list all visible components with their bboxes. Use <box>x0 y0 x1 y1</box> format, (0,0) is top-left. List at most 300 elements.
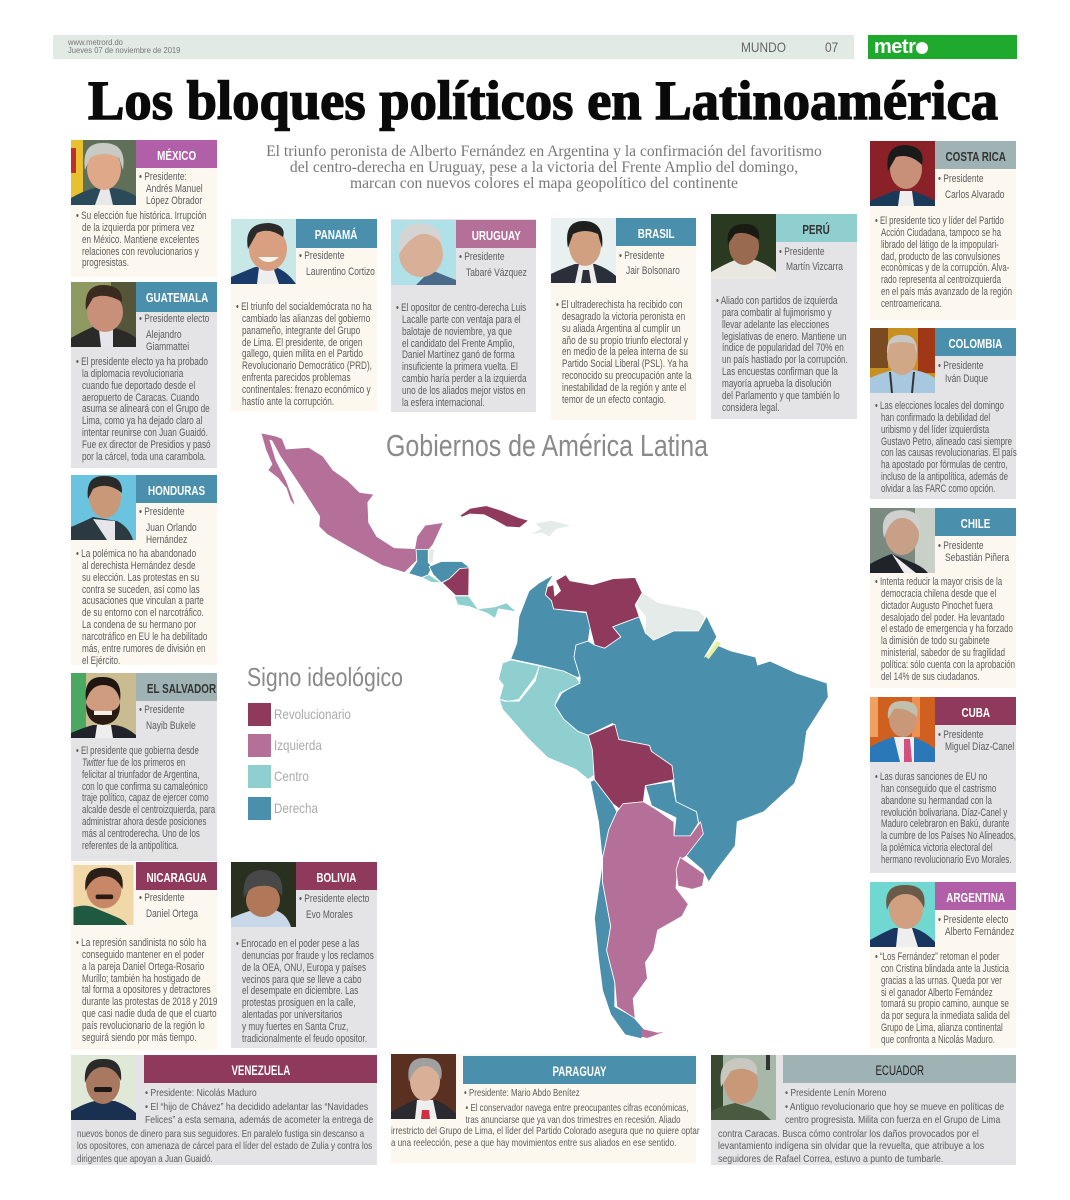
panel: Perú <box>711 214 857 419</box>
president and opening text <box>464 1086 689 1127</box>
text: Maduro celebraron en Bakú, durante <box>881 818 1009 830</box>
president <box>139 506 197 546</box>
heading: HONDURAS <box>148 483 205 498</box>
text: cambiado las alianzas del gobierno <box>242 313 370 325</box>
text: con lo que confirma su camaleónico <box>82 781 208 793</box>
text: más, entre rumores de división en <box>82 643 206 655</box>
president: Sebastián Piñera <box>945 552 1009 564</box>
header bar <box>53 35 854 59</box>
Argentina <box>603 802 703 1019</box>
text: legislativas de enero. Mantiene un <box>722 331 847 343</box>
text <box>77 1129 372 1166</box>
text: • La represión sandinista no sólo ha <box>76 937 206 949</box>
Brazil <box>555 616 828 882</box>
heading <box>296 862 377 890</box>
text: Grupo de Lima, alianza continental <box>881 1022 1003 1034</box>
text: alcalde desde el centroizquierda, para <box>82 804 215 816</box>
president and opening text: • Presidente Lenín Moreno <box>785 1088 886 1099</box>
president and opening text: centro progresista. Milita con fuerza en el Grupo de Lima <box>785 1115 1000 1126</box>
president and opening text <box>785 1086 1004 1128</box>
panel: Colombia <box>870 328 1016 499</box>
president: • Presidente <box>938 729 984 741</box>
portrait: Giammattei <box>71 282 136 347</box>
Peru <box>499 666 596 780</box>
heading: ECUADOR <box>875 1063 924 1078</box>
heading: BOLIVIA <box>316 870 357 885</box>
president <box>938 360 988 385</box>
legend: Centro <box>248 765 271 788</box>
text: la diplomacia revolucionaria <box>82 368 183 380</box>
text: Daniel Martínez ganó de forma <box>402 349 515 361</box>
heading <box>136 140 217 168</box>
date and site: www.metrord.do <box>68 38 123 47</box>
text: narcotráfico en EU le ha debilitado <box>82 631 207 643</box>
label: Izquierda: Izquierda <box>274 737 322 753</box>
legend: Revolucionario <box>248 703 271 726</box>
text: año de su propio triunfo electoral y <box>562 335 688 347</box>
text: democracia chilena desde que el <box>881 588 996 600</box>
legend: Signo ideológico <box>247 660 417 825</box>
panel: Venezuela <box>71 1055 377 1165</box>
heading <box>136 475 217 503</box>
heading <box>144 1055 377 1083</box>
text: denuncias por fraude y los reclamos <box>242 950 374 962</box>
text: librado del látigo de la impopulari- <box>881 239 999 251</box>
heading: MÉXICO <box>157 148 196 163</box>
president: • Presidente electo <box>139 313 209 325</box>
heading: URUGUAY <box>471 228 521 243</box>
president and opening text: • Presidente: Mario Abdo Benítez <box>464 1088 580 1099</box>
date and site: Jueves 07 de noviembre de 2019 <box>68 46 180 55</box>
logo: metro <box>868 35 1017 59</box>
text: hastío ante la corrupción. <box>242 396 334 408</box>
text: gallego, quien milita en el Partido <box>242 348 363 360</box>
president: • Presidente electo <box>938 914 1008 926</box>
president <box>938 730 1014 754</box>
text <box>236 301 372 408</box>
heading <box>776 214 857 242</box>
text: cuando fue deportado desde el <box>82 380 195 392</box>
president and opening text: • Antiguo revolucionario que hoy se mueve en políticas de <box>785 1102 1004 1113</box>
text <box>718 1129 984 1166</box>
map: Latin America <box>225 420 865 1050</box>
text: • Enrocado en el poder pese a las <box>236 938 359 950</box>
portrait: Nicolás Maduro <box>71 1055 136 1120</box>
Cuba <box>460 506 529 528</box>
text: que casi nadie duda de que el cuarto <box>82 1008 217 1020</box>
president: • Presidente <box>299 250 345 262</box>
portrait: Lenín Moreno <box>711 1055 776 1120</box>
president: Giammattei <box>146 341 189 353</box>
portrait: Tabaré Vázquez <box>391 220 456 285</box>
president: • Presidente <box>139 892 185 904</box>
portrait: Sebastián Piñera <box>870 508 935 573</box>
text: Fue ex director de Presidios y pasó <box>82 439 211 451</box>
intro text: del centro-derecha en Uruguay, pese a la victoria del Frente Amplio del domingo, <box>290 159 798 176</box>
panel: Ecuador <box>711 1055 1016 1165</box>
text: intentar reunirse con Juan Guaidó. <box>82 427 208 439</box>
panel: Costa Rica <box>870 141 1016 320</box>
text: el Ejército. <box>82 655 120 667</box>
panel: Chile <box>870 508 1016 688</box>
heading: COLOMBIA <box>949 336 1002 351</box>
Paraguay <box>645 782 698 836</box>
text: del 14% de sus ciudadanos. <box>881 671 980 683</box>
Hispaniola <box>531 520 570 537</box>
Guianas <box>636 593 705 640</box>
text: seguirá siendo por más tiempo. <box>82 1032 196 1044</box>
heading <box>935 697 1016 725</box>
text <box>396 302 527 409</box>
portrait: Carlos Alvarado <box>870 141 935 206</box>
Amazon delta <box>706 641 721 659</box>
president and opening text <box>145 1086 373 1128</box>
heading: PANAMÁ <box>315 227 358 242</box>
heading <box>463 1056 696 1084</box>
heading: COSTA RICA <box>945 149 1006 164</box>
heading: BRASIL <box>638 226 674 241</box>
Uruguay <box>676 857 705 889</box>
president: • Presidente <box>938 360 984 372</box>
text: del Parlamento y que también lo <box>722 390 840 402</box>
text: su aliada Argentina al cumplir un <box>562 323 681 335</box>
text: ministerial, sabedor de su fragilidad <box>881 647 1005 659</box>
text: considera legal. <box>722 402 779 414</box>
text: Acción Ciudadana, tampoco se ha <box>881 227 1001 239</box>
president: • Presidente <box>619 250 665 262</box>
text: protestas prosiguen en la calle, <box>242 997 356 1009</box>
text: • El presidente electo ya ha probado <box>76 356 208 368</box>
panel: Paraguay <box>391 1054 696 1163</box>
text: referentes de la antipolítica. <box>82 840 179 852</box>
text: administrar ahora desde posiciones <box>82 816 206 828</box>
text <box>76 356 211 463</box>
president: • Presidente: <box>139 171 187 183</box>
Nicaragua <box>442 568 469 596</box>
text <box>556 299 692 406</box>
president: Martín Vizcarra <box>786 261 843 273</box>
text <box>875 772 1016 867</box>
text: felicitar al triunfador de Argentina, <box>82 769 199 781</box>
panel: Nicaragua <box>71 862 217 1050</box>
president: • Presidente <box>779 246 825 258</box>
president: Laurentino Cortizo <box>306 266 375 278</box>
portrait: Nayib Bukele <box>71 673 136 738</box>
text: • Intenta reducir la mayor crisis de la <box>875 576 1002 588</box>
text: incluso de la antipolítica, además de <box>881 471 1008 483</box>
text: • El presidente que gobierna desde <box>76 745 199 757</box>
heading: PARAGUAY <box>552 1064 606 1079</box>
heading <box>935 328 1016 356</box>
text: índice de popularidad del 70% en <box>722 342 844 354</box>
title: Los bloques políticos en Latinoamérica <box>88 70 998 131</box>
heading <box>136 862 217 890</box>
heading: NICARAGUA <box>146 870 207 885</box>
heading <box>296 219 377 248</box>
label: Centro: Centro <box>274 768 309 784</box>
president: Alberto Fernández <box>945 926 1014 938</box>
text: a la pareja Daniel Ortega-Rosario <box>82 961 204 973</box>
text: más al centroderecha. Uno de los <box>82 828 200 840</box>
text: contra se suceden, así como las <box>82 584 200 596</box>
text: dictador Augusto Pinochet fuera <box>881 600 993 612</box>
text <box>236 938 374 1045</box>
text: durante las protestas de 2018 y 2019 <box>82 996 217 1008</box>
date and site <box>68 38 180 55</box>
president: Miguel Díaz-Canel <box>945 741 1014 753</box>
text: han confirmado la debilidad del <box>881 412 990 424</box>
text <box>875 400 1017 495</box>
heading: GUATEMALA <box>146 290 208 305</box>
panel: México <box>71 140 217 277</box>
heading: PERÚ <box>803 222 830 237</box>
president and opening text: • El conservador navega entre preocupantes cifras económicas, <box>466 1103 689 1114</box>
portrait: Martín Vizcarra <box>711 214 776 272</box>
text: • El presidente tico y líder del Partido <box>875 215 1004 227</box>
text: Lacalle parte con ventaja para el <box>402 314 521 326</box>
text: política: sólo cuenta con la aprobación <box>881 659 1015 671</box>
president: Tabaré Vázquez <box>466 267 527 279</box>
president: • Presidente <box>938 540 984 552</box>
text: Gustavo Petro, alineado casi siempre <box>881 436 1012 448</box>
Costa Rica and Panama <box>454 596 517 618</box>
heading <box>935 141 1016 169</box>
text: Partido Social Liberal (PSL). Ya ha <box>562 358 688 370</box>
president: Juan Orlando <box>146 522 197 534</box>
panel: Uruguay <box>391 219 536 412</box>
text: Lima, como ya ha dejado claro al <box>82 415 202 427</box>
section name: MUNDO <box>741 39 786 55</box>
text <box>76 210 207 269</box>
text <box>391 1126 700 1150</box>
panel: Panamá <box>231 219 377 411</box>
panel: Argentina <box>870 882 1016 1048</box>
president: Andrés Manuel <box>146 183 203 195</box>
text: al derechista Hernández desde <box>82 560 196 572</box>
text: en el país más avanzado de la región <box>881 286 1012 298</box>
text: • El triunfo del socialdemócrata no ha <box>236 301 372 313</box>
president <box>139 313 209 353</box>
president: Evo Morales <box>306 909 353 921</box>
president and opening text: Felices” a esta semana, además de acometer la entrega de <box>145 1115 373 1126</box>
text: de la OEA, ONU, Europa y países <box>242 962 366 974</box>
heading <box>136 282 217 312</box>
heading: VENEZUELA <box>231 1063 290 1078</box>
heading <box>616 218 696 246</box>
legend: Derecha <box>248 797 271 820</box>
president <box>139 171 203 207</box>
panel: Bolivia <box>231 862 377 1048</box>
text: • Su elección fue histórica. Irrupción <box>76 210 207 222</box>
intro text <box>266 143 822 192</box>
text: vecinos para que se lleve a cabo <box>242 974 362 986</box>
text: desagrado la victoria peronista en <box>562 311 685 323</box>
portrait: Daniel Ortega <box>74 865 134 925</box>
heading <box>783 1055 1016 1083</box>
text: para combatir al fujimorismo y <box>722 307 831 319</box>
Belize <box>429 549 434 563</box>
text: levantamiento indígena sin olvidar que la revuelta, que atribuye a los <box>718 1141 984 1152</box>
portrait: Laurentino Cortizo <box>231 219 296 284</box>
president and opening text: • El “hijo de Chávez” ha decidido adelantar las “Navidades <box>145 1102 368 1113</box>
text: económicas y de la corrupción. Alva- <box>881 262 1009 274</box>
text: por la cárcel, toda una carambola. <box>82 451 206 463</box>
text: Revolucionario Democrático (PRD), <box>242 360 372 372</box>
intro text: marcan con nuevos colores el mapa geopolítico del continente <box>350 175 738 192</box>
text: los opositores, con amenaza de cárcel para el líder del estado de Zulia y contra los <box>77 1141 372 1152</box>
Guatemala <box>409 549 432 578</box>
text: mayoría aprueba la disolución <box>722 378 831 390</box>
text: alentadas por universitarios <box>242 1009 342 1021</box>
text: asuma se alineará con el Grupo de <box>82 403 210 415</box>
president <box>139 892 198 920</box>
heading <box>136 673 217 701</box>
text <box>76 548 208 667</box>
heading: EL SALVADOR <box>147 681 216 696</box>
panel: Guatemala <box>71 282 217 468</box>
portrait: Iván Duque <box>870 328 935 393</box>
Venezuela <box>545 575 642 648</box>
text: temor de un efecto contagio. <box>562 394 666 406</box>
text: seguidores de Rafael Correa, estuvo a punto de tumbarle. <box>718 1154 943 1165</box>
text: han conseguido que el castrismo <box>881 783 996 795</box>
text: • “Los Fernández” retoman el poder <box>875 951 1000 963</box>
text: revolución bolivariana. Díaz-Canel y <box>881 807 1007 819</box>
heading <box>456 220 536 248</box>
Bolivia <box>588 724 674 812</box>
text: contra Caracas. Busca cómo controlar los daños provocados por el <box>718 1129 979 1140</box>
text: en México. Mantiene excelentes <box>82 234 199 246</box>
text: irrestricto del Grupo de Lima, el líder del Partido Colorado asegura que no quiere optar <box>391 1126 700 1137</box>
text: tomará su propio camino, aunque se <box>881 998 1009 1010</box>
text: • Las elecciones locales del domingo <box>875 400 1004 412</box>
president <box>619 250 680 277</box>
text: un país hastiado por la corrupción. <box>722 354 848 366</box>
portrait: Evo Morales <box>231 862 296 927</box>
text: enfrenta parecidos problemas <box>242 372 351 384</box>
text: conseguido mantener en el poder <box>82 949 204 961</box>
president and opening text: tras anunciarse que ya van dos trimestres en recesión. Aliado <box>466 1115 681 1126</box>
page number: 07 <box>825 39 838 55</box>
text: la esfera internacional. <box>402 397 485 409</box>
text: que confronta a Nicolás Maduro. <box>881 1034 995 1046</box>
president <box>938 915 1014 939</box>
text <box>76 937 218 1044</box>
text: con las causas revolucionarias. El país <box>881 447 1017 459</box>
text: llevar adelante las elecciones <box>722 319 829 331</box>
president: López Obrador <box>146 195 202 207</box>
text <box>716 295 848 414</box>
president: • Presidente <box>139 704 185 716</box>
Chile <box>590 780 645 1039</box>
text: Murillo; también ha hostigado de <box>82 973 201 985</box>
text: relaciones con revolucionarios y <box>82 246 199 258</box>
text: si el ganador Alberto Fernández <box>881 987 993 999</box>
portrait: Mario Abdo Benítez <box>391 1054 456 1119</box>
president: • Presidente <box>938 173 984 185</box>
portrait: Juan Orlando Hernández <box>71 475 136 540</box>
El Salvador <box>422 575 441 583</box>
text: hermano revolucionario Evo Morales. <box>881 854 1012 866</box>
text: nuevos bonos de dinero para sus seguidores. En paralelo fustiga sin descanso a <box>77 1129 364 1140</box>
president: • Presidente <box>459 251 505 263</box>
president: Carlos Alvarado <box>945 189 1004 201</box>
text: panameño, integrante del Grupo <box>242 325 360 337</box>
president <box>779 246 843 273</box>
legend: Izquierda <box>248 734 271 757</box>
text: uribismo y del líder izquierdista <box>881 424 989 436</box>
text: Twitter fue de los primeros en <box>82 757 185 769</box>
text: ha apostado por fórmulas de centro, <box>881 459 1008 471</box>
text: da por segura la inmediata salida del <box>881 1010 1010 1022</box>
Ecuador <box>498 660 539 701</box>
text: • El ultraderechista ha recibido con <box>556 299 682 311</box>
heading <box>935 508 1016 536</box>
president <box>938 541 1009 565</box>
text: de Lima. El presidente, de origen <box>242 337 362 349</box>
text: de la izquierda por primera vez <box>82 222 195 234</box>
panel: Brasil <box>551 218 696 420</box>
text: progresistas. <box>82 257 129 269</box>
panel: Cuba <box>870 697 1016 873</box>
text: Las encuestas confirman que la <box>722 366 838 378</box>
text <box>76 745 216 852</box>
Colombia <box>511 575 590 677</box>
panel: El Salvador <box>71 673 217 861</box>
president: Jair Bolsonaro <box>626 265 680 277</box>
text: y muy fuertes en Santa Cruz, <box>242 1021 348 1033</box>
heading: CUBA <box>961 705 990 720</box>
text: • Aliado con partidos de izquierda <box>716 295 837 307</box>
text: balotaje de noviembre, ya que <box>402 326 512 338</box>
text: tradicionalmente el feudo opositor. <box>242 1033 367 1045</box>
president: Nayib Bukele <box>146 720 196 732</box>
text: inestabilidad de la región y ante el <box>562 382 686 394</box>
text: la polémica victoria electoral del <box>881 842 993 854</box>
text: insuficiente la primera vuelta. El <box>402 361 518 373</box>
text: el candidato del Frente Amplio, <box>402 338 515 350</box>
text: a una reelección, pese a que hay movimientos entre sus aliados en ese sentido. <box>391 1138 676 1149</box>
intro text: El triunfo peronista de Alberto Fernández en Argentina y la confirmación del favoritismo <box>266 143 822 160</box>
text: su elección. Las protestas en su <box>82 572 199 584</box>
heading: ARGENTINA <box>946 890 1005 905</box>
text: La condena de su hermano por <box>82 619 196 631</box>
president <box>299 250 375 278</box>
president <box>938 173 1004 201</box>
portrait: Miguel Díaz-Canel <box>870 697 935 762</box>
president: Iván Duque <box>945 373 988 385</box>
text: en medio de la pelea interna de su <box>562 346 688 358</box>
label: Revolucionario: Revolucionario <box>274 706 351 722</box>
panel: Honduras <box>71 475 217 665</box>
text: uno de los aliados mejor vistos en <box>402 385 526 397</box>
portrait: Jair Bolsonaro <box>551 218 616 283</box>
text: centroamericana. <box>881 298 942 310</box>
president and opening text: • Presidente: Nicolás Maduro <box>145 1088 257 1099</box>
president: • Presidente <box>139 506 185 518</box>
text: país revolucionario de la región lo <box>82 1020 205 1032</box>
text: el estado de emergencia y ha forzado <box>881 623 1013 635</box>
president <box>459 251 527 279</box>
president: Alejandro <box>146 329 182 341</box>
text: la dimisión de todo su gabinete <box>881 635 990 647</box>
text: tal forma a opositores y detractores <box>82 984 211 996</box>
text <box>875 577 1015 684</box>
portrait: López Obrador <box>71 140 136 205</box>
text: el desempate en diciembre. Las <box>242 985 358 997</box>
text: de su entorno con el narcotráfico. <box>82 607 204 619</box>
text: la cumbre de los Países No Alineados, <box>881 830 1016 842</box>
